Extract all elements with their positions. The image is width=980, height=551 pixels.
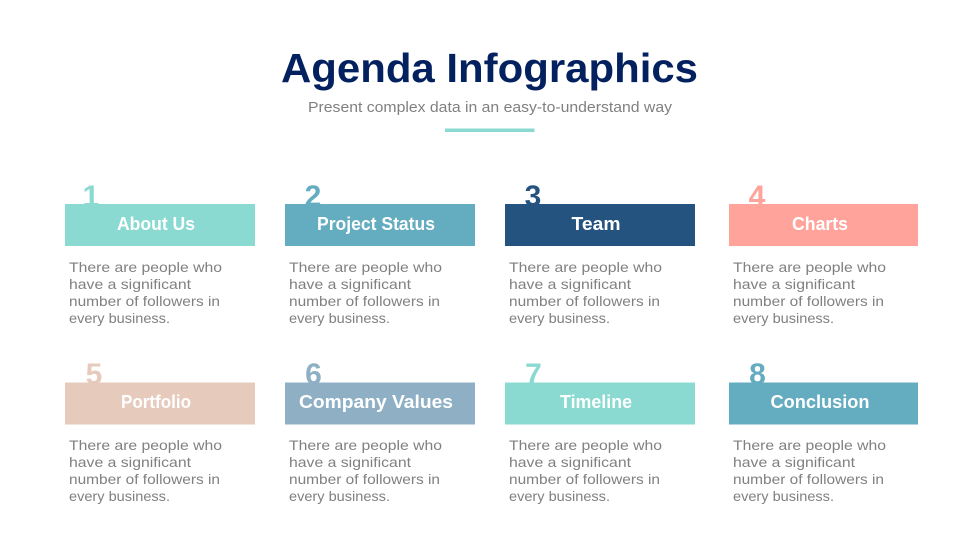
heading: Charts: Charts (792, 214, 848, 234)
subtitle: Present complex data in an easy-to-understand way (308, 99, 673, 116)
body text: have a significant (733, 276, 855, 292)
body text: every business. (289, 488, 390, 504)
body text: There are people who (733, 437, 886, 453)
body text (509, 437, 662, 504)
body text: number of followers in (69, 471, 220, 487)
body text: number of followers in (289, 471, 440, 487)
body text: number of followers in (509, 293, 660, 309)
body text: There are people who (509, 259, 662, 275)
body text: number of followers in (733, 293, 884, 309)
panel: Company Values (285, 358, 475, 504)
body text: every business. (509, 488, 610, 504)
body text: number of followers in (289, 293, 440, 309)
body text: number of followers in (69, 293, 220, 309)
body text (289, 437, 442, 504)
body text (69, 259, 222, 326)
number 7: 7 (525, 358, 542, 391)
body text: every business. (509, 310, 610, 326)
body text (733, 259, 886, 326)
number 5: 5 (86, 358, 102, 391)
number 2: 2 (305, 180, 321, 213)
body text: There are people who (509, 437, 662, 453)
body text: have a significant (289, 276, 411, 292)
body text: There are people who (289, 437, 442, 453)
body text: every business. (733, 310, 834, 326)
body text: There are people who (733, 259, 886, 275)
heading: Team: Team (572, 214, 620, 234)
body text: every business. (69, 488, 170, 504)
heading: Project Status: Project Status (317, 214, 435, 234)
heading: Conclusion: Conclusion (770, 392, 870, 412)
body text: have a significant (509, 454, 631, 470)
panel: Conclusion (729, 358, 918, 504)
heading: Company Values: Company Values (299, 392, 453, 412)
heading bar: Timeline (505, 382, 695, 424)
panel: Charts (729, 180, 918, 326)
body text: number of followers in (509, 471, 660, 487)
number 8: 8 (749, 358, 766, 391)
heading: Timeline: Timeline (560, 392, 632, 412)
number 3: 3 (525, 180, 541, 213)
body text: have a significant (69, 454, 191, 470)
heading bar: Project Status (285, 204, 475, 246)
body text: There are people who (69, 437, 222, 453)
heading bar: Company Values (285, 382, 475, 424)
heading bar: Charts (729, 204, 918, 246)
panel: Project Status (285, 180, 475, 326)
body text: have a significant (509, 276, 631, 292)
body text (69, 437, 222, 504)
body text: every business. (289, 310, 390, 326)
heading bar: About Us (65, 204, 255, 246)
body text (509, 259, 662, 326)
heading: Portfolio: Portfolio (121, 392, 191, 412)
number 6: 6 (305, 358, 322, 391)
body text: number of followers in (733, 471, 884, 487)
panel: Team (505, 180, 695, 326)
body text: every business. (69, 310, 170, 326)
body text: have a significant (289, 454, 411, 470)
title: Agenda Infographics (281, 45, 698, 91)
number 1: 1 (83, 180, 99, 213)
panel: Portfolio (65, 358, 255, 504)
heading bar: Team (505, 204, 695, 246)
heading bar: Conclusion (729, 382, 918, 424)
body text: have a significant (733, 454, 855, 470)
number 4: 4 (749, 180, 766, 213)
body text (289, 259, 442, 326)
body text: There are people who (289, 259, 442, 275)
accent line (445, 128, 534, 132)
body text: There are people who (69, 259, 222, 275)
panel: Timeline (505, 358, 695, 504)
panel: About Us (65, 180, 255, 326)
heading bar: Portfolio (65, 382, 255, 424)
body text (733, 437, 886, 504)
body text: every business. (733, 488, 834, 504)
body text: have a significant (69, 276, 191, 292)
heading: About Us: About Us (117, 214, 195, 234)
